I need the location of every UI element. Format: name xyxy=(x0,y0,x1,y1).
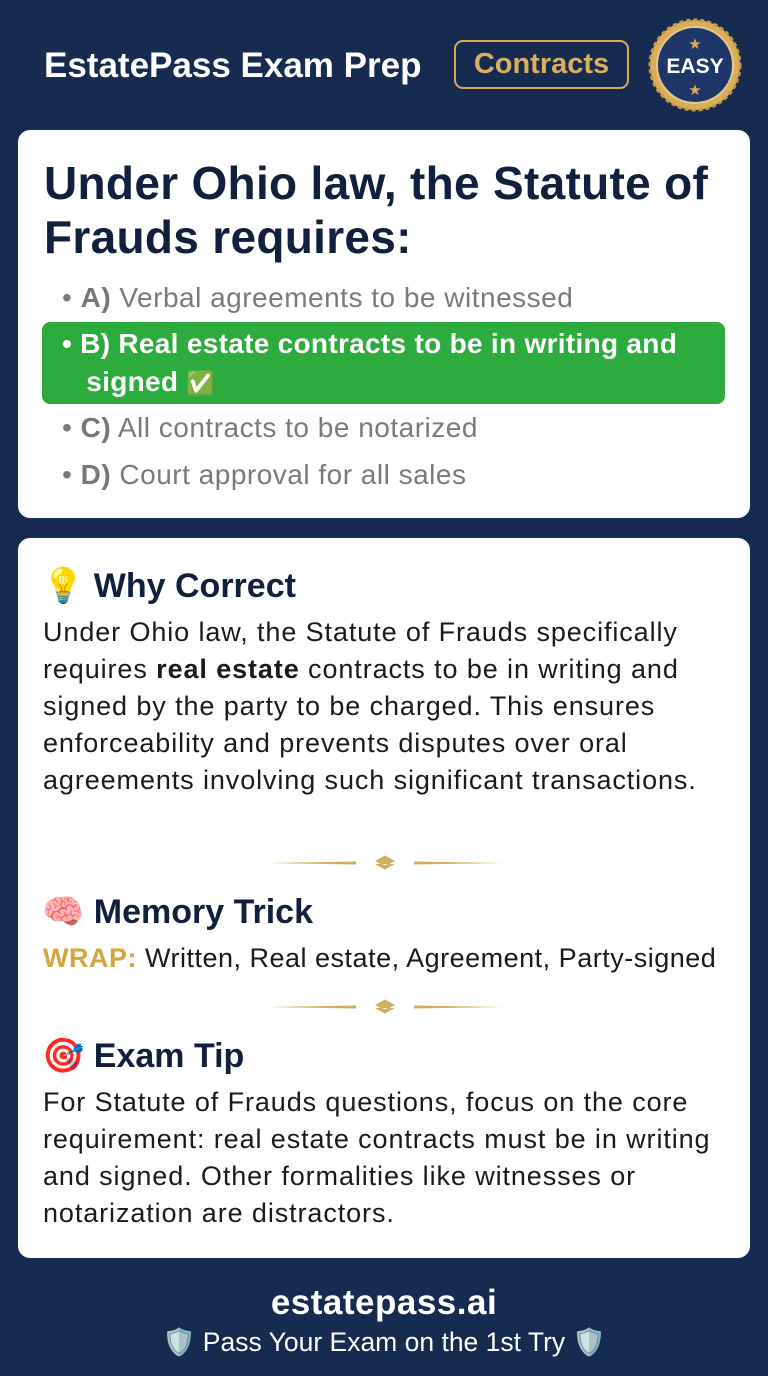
question heading: Frauds requires: xyxy=(44,211,412,263)
divider xyxy=(270,855,500,870)
option C: • C) All contracts to be notarized xyxy=(62,412,478,443)
why correct text: requires real estate contracts to be in writing and xyxy=(43,654,679,684)
footer tagline: 🛡️ Pass Your Exam on the 1st Try 🛡️ xyxy=(162,1327,606,1357)
option B correct: signed ✅ xyxy=(86,366,215,397)
divider xyxy=(270,999,500,1014)
why correct text: signed by the party to be charged. This ensures xyxy=(43,691,655,721)
difficulty badge: ★ xyxy=(688,36,702,53)
why correct text xyxy=(43,617,697,795)
question heading: Under Ohio law, the Statute of xyxy=(44,157,708,209)
heading: exam tip: 🎯 Exam Tip xyxy=(42,1037,244,1075)
exam tip text xyxy=(43,1087,710,1228)
heading: why correct: 💡 Why Correct xyxy=(42,567,296,605)
difficulty badge: ★ xyxy=(688,82,702,99)
why correct text: enforceability and prevents disputes over oral xyxy=(43,728,628,758)
option B correct: • B) Real estate contracts to be in writing and xyxy=(62,328,677,359)
why correct text: Under Ohio law, the Statute of Frauds specifically xyxy=(43,617,678,647)
heading: memory trick: 🧠 Memory Trick xyxy=(42,893,313,931)
option B correct xyxy=(42,322,725,404)
question heading xyxy=(44,157,708,263)
why correct text: agreements involving such significant transactions. xyxy=(43,765,697,795)
memory trick text: WRAP: Written, Real estate, Agreement, Party-signed xyxy=(43,943,716,973)
exam tip text: and signed. Other formalities like witnesses or xyxy=(43,1161,636,1191)
category badge xyxy=(454,40,629,89)
difficulty badge xyxy=(648,18,742,112)
option A: • A) Verbal agreements to be witnessed xyxy=(62,282,573,313)
difficulty badge: EASY xyxy=(666,55,724,78)
exam tip text: requirement: real estate contracts must be in writing xyxy=(43,1124,710,1154)
category badge: Contracts xyxy=(474,48,609,80)
panel: question xyxy=(18,130,750,518)
exam tip text: notarization are distractors. xyxy=(43,1198,395,1228)
panel: explanation xyxy=(18,538,750,1258)
option D: • D) Court approval for all sales xyxy=(62,459,466,490)
exam tip text: For Statute of Frauds questions, focus on the core xyxy=(43,1087,688,1117)
footer site: estatepass.ai xyxy=(271,1283,497,1322)
header title: EstatePass Exam Prep xyxy=(44,46,421,85)
